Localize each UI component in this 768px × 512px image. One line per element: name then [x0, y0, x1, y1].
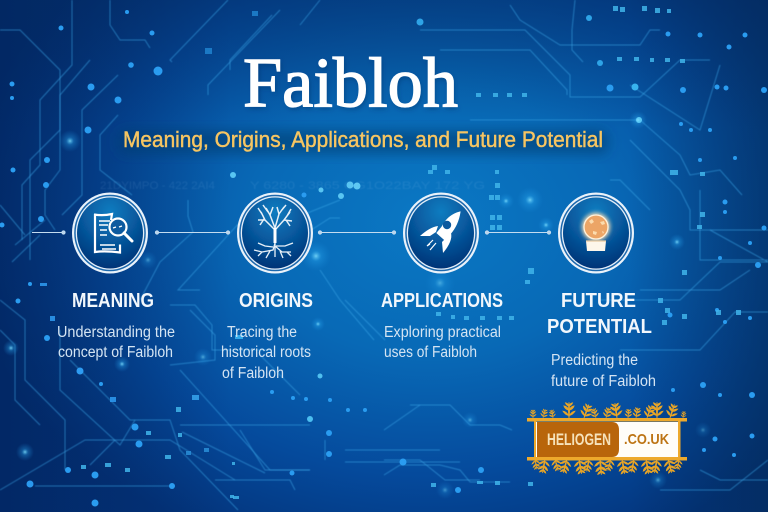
description: Predicting the	[551, 352, 638, 369]
description: uses of Faibloh	[384, 344, 477, 361]
label: FUTURE	[561, 290, 636, 312]
logo brown panel	[537, 422, 619, 457]
title	[243, 44, 459, 125]
label: POTENTIAL	[547, 316, 652, 338]
description: future of Faibloh	[551, 373, 656, 390]
description	[57, 324, 175, 361]
icon: document with magnifier	[72, 192, 148, 274]
subtitle text: Meaning, Origins, Applications, and Future Potential	[123, 127, 603, 152]
faded background code text: Y 6280 - 3865 GG1O	[250, 180, 386, 192]
description: Understanding the	[57, 324, 175, 341]
icon: rocket	[403, 192, 479, 274]
logo: heliogen.co.uk	[527, 402, 687, 475]
title shadow: Faibloh	[245, 47, 459, 125]
logo frame	[527, 418, 687, 460]
label: ORIGINS	[239, 290, 313, 312]
label: MEANING	[72, 290, 154, 312]
description: Tracing the	[227, 324, 297, 341]
logo leaves	[529, 402, 687, 475]
step: future potential	[547, 192, 656, 390]
description: of Faibloh	[222, 365, 284, 382]
subtitle	[118, 127, 608, 154]
description	[384, 324, 501, 361]
subtitle shadow band	[118, 130, 608, 154]
step: applications	[381, 192, 503, 361]
faded background code text	[100, 180, 485, 192]
description	[221, 324, 311, 382]
label	[547, 290, 652, 338]
logo domain: .CO.UK	[624, 431, 669, 448]
faded background code text: 21DYIMPO - 422 2AI4	[100, 180, 215, 192]
description: historical roots	[221, 344, 311, 361]
connector lines	[32, 231, 551, 234]
title text: Faibloh	[243, 44, 458, 122]
faded background code text: 22BAY 172 YG	[385, 180, 485, 192]
logo name: HELIOGEN	[547, 430, 611, 449]
glow stars	[3, 111, 711, 499]
description	[551, 352, 656, 390]
label: APPLICATIONS	[381, 290, 503, 312]
description: concept of Faibloh	[58, 344, 173, 361]
step: origins	[221, 192, 313, 382]
logo white panel	[536, 422, 678, 457]
description: Exploring practical	[384, 324, 501, 341]
icon: crystal ball	[558, 192, 634, 274]
step: meaning	[57, 192, 175, 361]
icon: tree with roots	[237, 192, 313, 274]
